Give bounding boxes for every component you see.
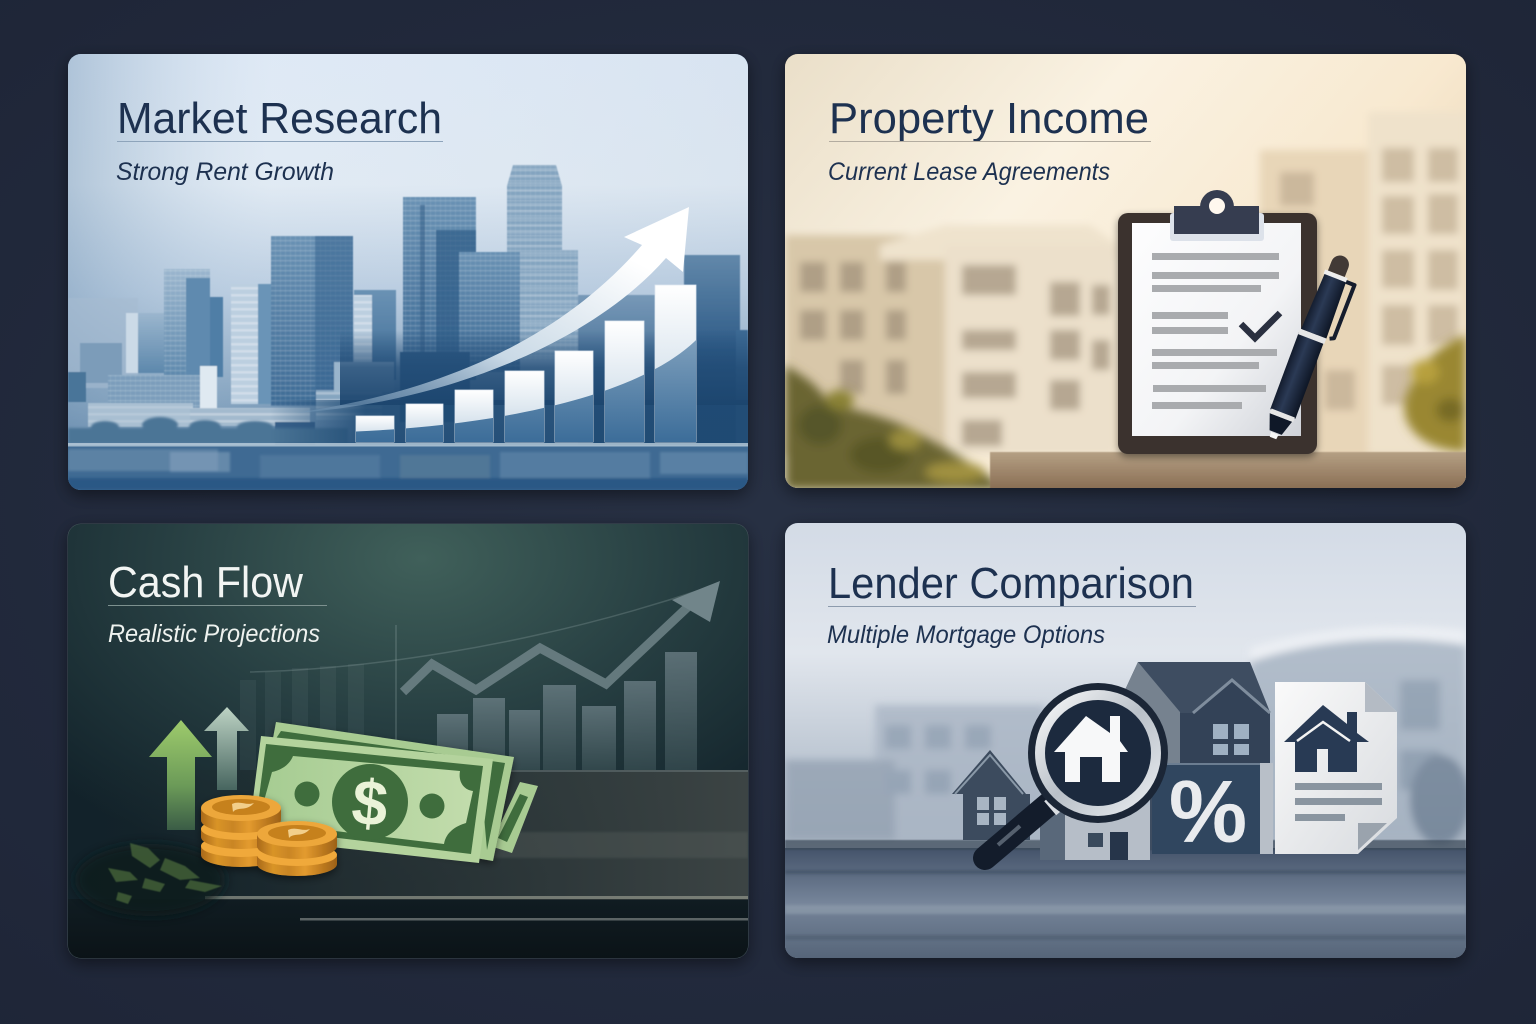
dark base behind chart (270, 330, 748, 445)
icon: document (1275, 682, 1397, 854)
icon: large house (1125, 662, 1270, 850)
ground line (68, 443, 748, 446)
panel: property income (785, 54, 1471, 492)
document lines (1152, 253, 1279, 409)
panel: market research (68, 54, 748, 490)
subtitle: Realistic Projections (108, 620, 320, 648)
chart (250, 581, 720, 770)
icon: small house (952, 750, 1030, 840)
panel: lender comparison (785, 523, 1470, 958)
growth arrow (295, 207, 689, 413)
floor (785, 848, 1466, 958)
bar chart (340, 285, 700, 442)
title: Cash Flow (108, 558, 303, 607)
table surface (260, 770, 748, 900)
city skyline (68, 165, 748, 446)
tree line (68, 417, 348, 444)
icon: green arrow (149, 720, 212, 830)
bush (78, 843, 226, 904)
icon: percent tile: % (1169, 762, 1247, 861)
checkmark (1241, 313, 1280, 338)
icon: coin stacks (201, 795, 337, 876)
icon: document house (1284, 705, 1369, 772)
title: Property Income (829, 94, 1149, 143)
blurred trees (785, 335, 1466, 490)
faded background bars (240, 664, 364, 770)
icon: percent tile (1152, 762, 1273, 861)
panel: cash flow (68, 524, 748, 958)
icon: grey arrow (204, 707, 249, 790)
icon: magnifying glass (985, 683, 1168, 858)
icon: banknotes: $ (349, 766, 391, 840)
icon: banknotes (248, 722, 538, 863)
title: Market Research (117, 94, 442, 143)
title: Lender Comparison (828, 559, 1194, 608)
subtitle: Current Lease Agreements (828, 158, 1110, 186)
icon: clipboard (1118, 190, 1317, 454)
blurred apartment building right (1260, 112, 1466, 455)
foreground city haze (68, 445, 748, 490)
table (990, 452, 1471, 492)
subtitle: Multiple Mortgage Options (827, 621, 1105, 649)
subtitle: Strong Rent Growth (116, 158, 334, 186)
icon: pen (1260, 251, 1363, 446)
blurred buildings (785, 626, 1470, 845)
blurred apartment building left (785, 225, 1118, 455)
icon: light house front (1040, 800, 1150, 860)
